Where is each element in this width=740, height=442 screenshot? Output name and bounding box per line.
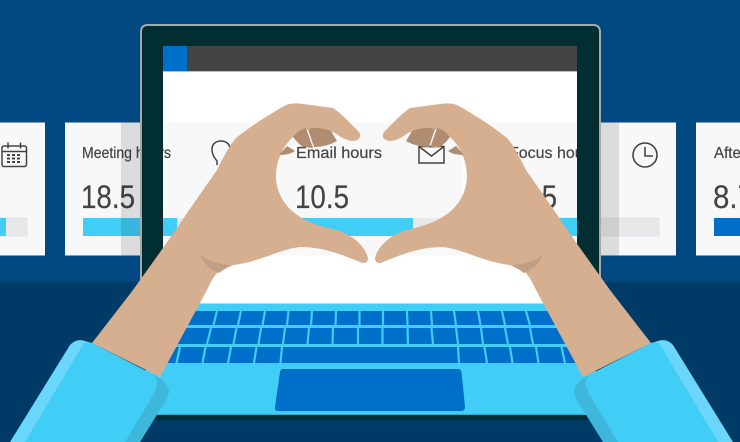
progress bar: focus <box>509 218 659 236</box>
card: email hours <box>279 122 463 256</box>
laptop shadow on left card <box>121 122 140 256</box>
keyboard <box>165 311 577 363</box>
card: calendar hours <box>0 122 45 256</box>
laptop screen <box>163 46 577 303</box>
card: focus hours <box>492 122 676 256</box>
card: after hours <box>696 122 740 256</box>
laptop keyboard base <box>140 303 601 420</box>
value: 18.5: 18.5 <box>81 179 135 215</box>
curled fingers <box>406 128 464 155</box>
value: focus: 14.5 <box>503 179 557 215</box>
card: meeting hours <box>65 122 250 256</box>
label: meeting hours: Meeting hours <box>82 145 171 162</box>
curled fingers <box>279 128 337 155</box>
laptop outer edge <box>140 24 601 303</box>
icon: calendar <box>2 142 26 166</box>
progress bar: after <box>714 218 740 236</box>
right hand <box>375 103 651 377</box>
background floor <box>0 282 740 442</box>
left hand <box>92 103 368 377</box>
hand crease <box>200 255 233 273</box>
icon: envelope <box>419 146 444 163</box>
trackpad <box>275 369 465 411</box>
laptop bezel <box>142 26 599 303</box>
left sleeve <box>10 340 169 442</box>
icon: light bulb <box>212 141 230 165</box>
progress bar: email <box>296 218 446 236</box>
hand crease <box>510 255 543 273</box>
background wall <box>0 0 740 282</box>
value: 10.5: 10.5 <box>295 179 349 215</box>
laptop shadow on right card <box>601 122 619 256</box>
progress bar: meeting <box>83 218 233 236</box>
label: focus hours: Focus hours <box>509 145 597 162</box>
label: email hours: Email hours <box>296 145 382 162</box>
right sleeve <box>574 340 733 442</box>
icon: clock <box>633 143 657 167</box>
